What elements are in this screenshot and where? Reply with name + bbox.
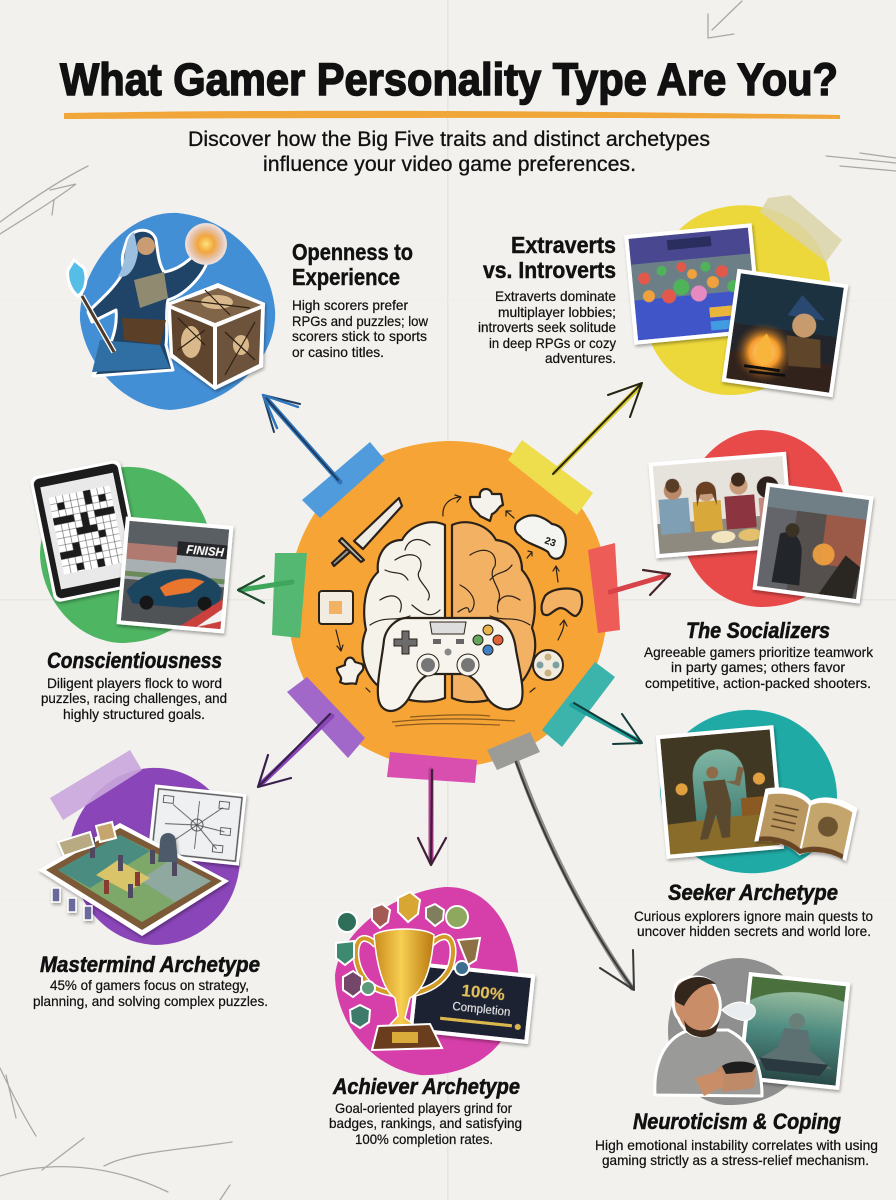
subtitle bbox=[188, 128, 710, 176]
photo: campfire bbox=[722, 269, 848, 397]
heading: vs. Introverts bbox=[483, 257, 616, 283]
panel: seeker archetype bbox=[634, 710, 873, 939]
body text: planning, and solving complex puzzles. bbox=[33, 993, 268, 1009]
heading: Mastermind Archetype bbox=[40, 952, 260, 977]
panel: neuroticism and coping bbox=[595, 958, 878, 1168]
body text: or casino titles. bbox=[292, 344, 384, 360]
photo: meditation bbox=[738, 972, 850, 1090]
central hub bbox=[288, 441, 608, 768]
subtitle: Discover how the Big Five traits and distinct archetypes bbox=[188, 128, 710, 151]
body text: 45% of gamers focus on strategy, bbox=[50, 977, 249, 993]
panel: extraverts vs introverts bbox=[478, 195, 848, 397]
puzzle and controller icons: 23 bbox=[543, 535, 558, 550]
body text bbox=[41, 675, 227, 722]
red blob bbox=[681, 430, 849, 607]
icon: stressed gamer bbox=[655, 977, 762, 1096]
body text: multiplayer lobbies; bbox=[498, 304, 616, 320]
body text: adventures. bbox=[545, 350, 616, 366]
completion card bbox=[409, 962, 535, 1044]
body text: 100% completion rates. bbox=[355, 1131, 493, 1147]
icon: wizard bbox=[68, 223, 227, 376]
body text bbox=[33, 977, 268, 1009]
body text: in deep RPGs or cozy bbox=[489, 335, 616, 351]
body text: High emotional instability correlates with using bbox=[595, 1137, 878, 1153]
grey blob bbox=[668, 958, 808, 1105]
achievement badges bbox=[336, 892, 480, 1028]
brain illustration bbox=[362, 522, 535, 702]
panel: mastermind archetype bbox=[33, 750, 268, 1009]
yellow blob bbox=[647, 205, 830, 395]
heading: Experience bbox=[292, 264, 400, 290]
game controller bbox=[378, 618, 523, 711]
arrow: extraverts bbox=[553, 383, 642, 474]
panel: openness to experience bbox=[68, 213, 429, 410]
body text: competitive, action-packed shooters. bbox=[645, 675, 871, 691]
body text: badges, rankings, and satisfying bbox=[329, 1115, 522, 1131]
body text: puzzles, racing challenges, and bbox=[41, 690, 227, 706]
purple blob bbox=[69, 768, 240, 945]
arrows from hub bbox=[238, 383, 670, 990]
body text: in party games; others favor bbox=[671, 659, 845, 675]
body text: Goal-oriented players grind for bbox=[335, 1100, 512, 1116]
pink blob bbox=[335, 887, 519, 1075]
body text: uncover hidden secrets and world lore. bbox=[637, 923, 871, 939]
sword icon bbox=[332, 498, 402, 566]
heading: Openness to bbox=[292, 239, 413, 265]
heading: The Socializers bbox=[686, 618, 830, 643]
body text: Curious explorers ignore main quests to bbox=[634, 908, 873, 924]
title: What Gamer Personality Type Are You? bbox=[60, 54, 838, 105]
icon: strategy whiteboard bbox=[147, 784, 247, 866]
heading: Achiever Archetype bbox=[332, 1074, 520, 1099]
photo: friends on sofa bbox=[648, 452, 794, 558]
panel: the socializers bbox=[644, 430, 874, 691]
teal blob bbox=[660, 710, 837, 873]
arrow: mastermind bbox=[258, 714, 332, 787]
title underline bbox=[64, 111, 840, 119]
body text bbox=[478, 288, 616, 366]
icon: puzzle cube bbox=[167, 283, 265, 390]
body text bbox=[644, 644, 874, 691]
body text bbox=[292, 297, 429, 360]
orange circle bbox=[288, 441, 608, 768]
photo: shooter bbox=[752, 482, 874, 604]
photo: race car: FINISH bbox=[186, 544, 225, 560]
body text: scorers stick to sports bbox=[292, 328, 427, 344]
arrow: seeker bbox=[572, 703, 642, 744]
arrow: achiever bbox=[418, 770, 446, 865]
sketch shadow bbox=[392, 715, 515, 726]
arrow: neuroticism bbox=[516, 762, 634, 990]
icon: board game bbox=[38, 822, 229, 936]
body text: RPGs and puzzles; low bbox=[292, 313, 429, 329]
photo: multiplayer lobby bbox=[624, 223, 762, 345]
heading bbox=[292, 239, 413, 290]
heading: Conscientiousness bbox=[47, 648, 222, 673]
photo: race car bbox=[116, 516, 234, 634]
body text bbox=[329, 1100, 522, 1147]
icon: crossword tablet bbox=[29, 459, 145, 603]
icon: trophy bbox=[356, 929, 453, 1050]
body text: Diligent players flock to word bbox=[47, 675, 222, 691]
arrow: openness bbox=[263, 395, 340, 482]
blue blob bbox=[80, 213, 275, 410]
heading: Extraverts bbox=[511, 232, 616, 258]
panel: conscientiousness bbox=[29, 459, 234, 722]
green blob bbox=[40, 467, 213, 643]
heading bbox=[483, 232, 616, 283]
body text: introverts seek solitude bbox=[478, 319, 616, 335]
body text: Extraverts dominate bbox=[495, 288, 616, 304]
body text: High scorers prefer bbox=[292, 297, 408, 313]
subtitle: influence your video game preferences. bbox=[263, 153, 636, 176]
photo: explorer in ruins bbox=[656, 725, 784, 859]
body text: highly structured goals. bbox=[63, 706, 205, 722]
body text: Agreeable gamers prioritize teamwork bbox=[644, 644, 874, 660]
body text bbox=[595, 1137, 878, 1168]
completion card: Completion bbox=[452, 1001, 511, 1019]
body text bbox=[634, 908, 873, 939]
icon: open book bbox=[753, 784, 858, 865]
small cycle arrows bbox=[336, 495, 567, 692]
tape strips bbox=[272, 440, 620, 783]
arrow: socializers bbox=[610, 570, 670, 595]
panel: achiever archetype bbox=[329, 887, 535, 1147]
arrow: conscientiousness bbox=[238, 576, 292, 603]
body text: gaming strictly as a stress-relief mechanism. bbox=[602, 1152, 869, 1168]
heading: Seeker Archetype bbox=[668, 880, 838, 905]
puzzle and controller icons bbox=[319, 489, 582, 684]
heading: Neuroticism & Coping bbox=[633, 1109, 842, 1134]
tape bbox=[50, 750, 142, 820]
completion card: 100% bbox=[461, 981, 506, 1004]
tape bbox=[760, 195, 842, 262]
